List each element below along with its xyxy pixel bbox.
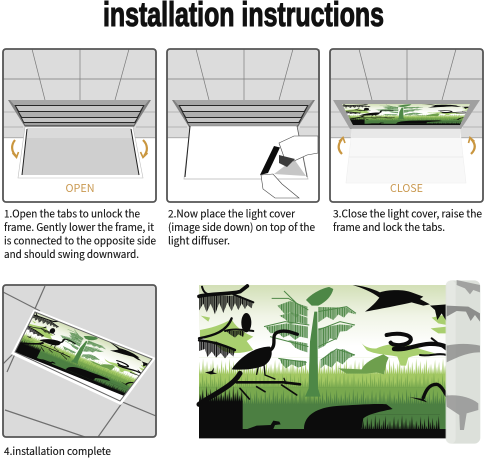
- icon: hands holding cover: [260, 136, 318, 198]
- image: rolled film with swamp wildlife scene: [199, 280, 480, 444]
- text: step 3: frame and lock the tabs.: [333, 220, 445, 235]
- white light cover: [184, 126, 308, 179]
- text: step 1: [4, 206, 156, 262]
- label: OPEN: OPEN: [66, 181, 94, 196]
- text: step 3: [333, 206, 482, 235]
- icon: right orange arrow: [140, 140, 148, 158]
- text: step 1: frame. Gently lower the frame, it: [4, 220, 154, 235]
- text: step 2: (image side down) on top of the: [168, 220, 315, 235]
- ceiling grid lines: [3, 286, 156, 437]
- text: step 1: and should swing downward.: [4, 247, 139, 262]
- text: step 3: 3.Close the light cover, raise the: [333, 206, 482, 222]
- panel: step 1 open: [3, 49, 156, 202]
- icon: right orange arrow: [468, 138, 475, 154]
- text: step 1: 1.Open the tabs to unlock the: [4, 206, 140, 222]
- icon: left orange arrow: [12, 140, 18, 158]
- panel: step 4 installed: [3, 285, 156, 437]
- fixture louvers: [8, 100, 151, 127]
- icon: left orange arrow: [339, 138, 345, 154]
- text: step 2: 2.Now place the light cover: [168, 206, 296, 222]
- fixture louvers: [172, 100, 315, 127]
- fixture image in step 3: [342, 104, 470, 125]
- panel: step 2 place cover: [167, 49, 320, 202]
- panel: step 3 close: [330, 49, 483, 202]
- image corner peeled: [274, 159, 306, 176]
- glow around fixture: [11, 309, 156, 405]
- label: CLOSE: CLOSE: [390, 181, 423, 196]
- lowered frame: [18, 127, 143, 178]
- text: step 1: is connected to the opposite side: [4, 234, 156, 248]
- fixture frame: [333, 100, 480, 129]
- installed scene image: [15, 312, 152, 399]
- text: step 2: [168, 206, 315, 248]
- text: step 4: 4.installation complete: [4, 444, 111, 459]
- transparent roll end: [446, 280, 480, 444]
- faded lowered frame: [346, 129, 466, 183]
- text: step 2: light diffuser.: [168, 234, 230, 248]
